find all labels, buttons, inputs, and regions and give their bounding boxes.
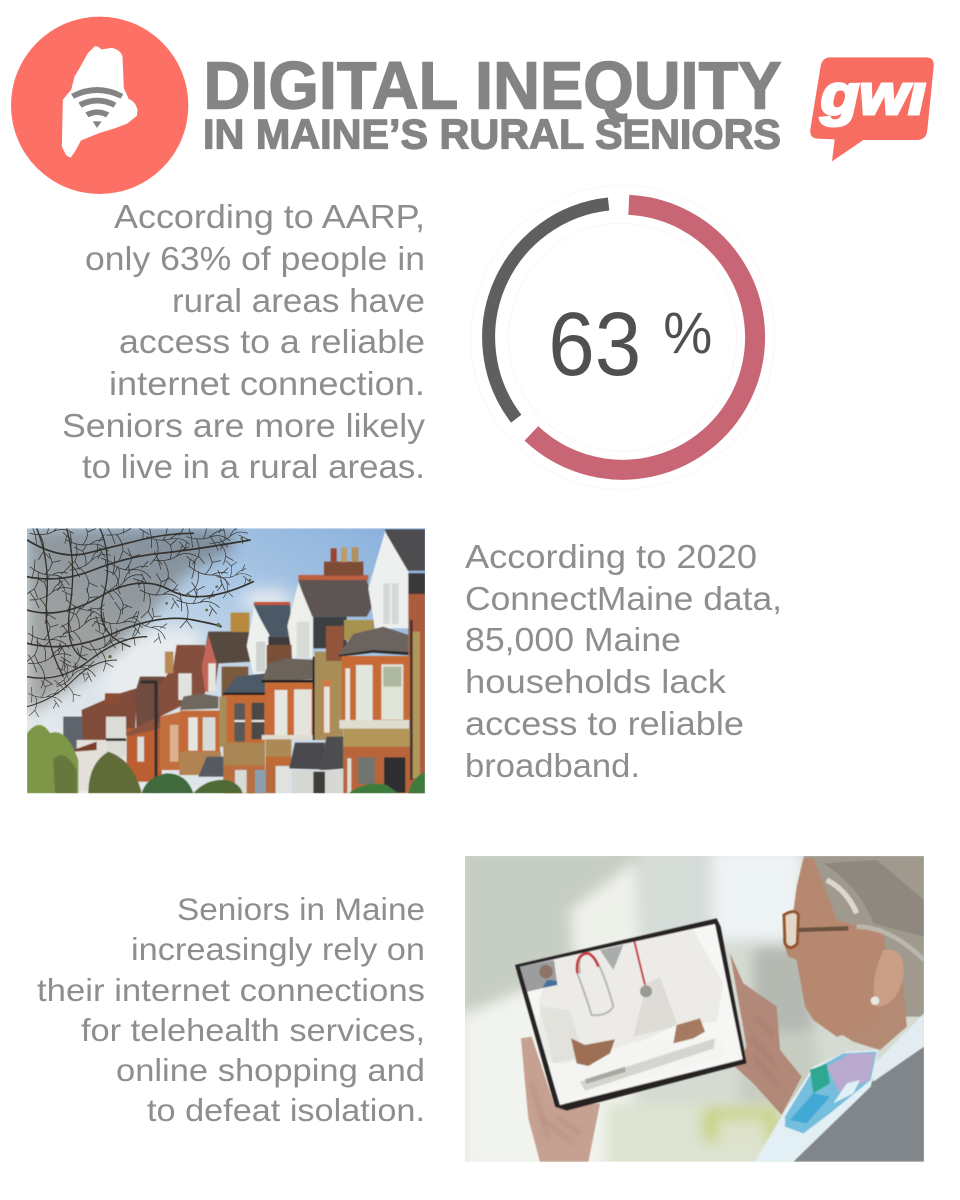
second house [298,580,374,617]
text block: AARP statistic: According to AARP, [114,198,425,235]
value label [548,295,712,395]
text block: ConnectMaine data: 85,000 Maine [465,621,681,658]
text block: telehealth reliance: online shopping and [116,1052,425,1088]
trees and bushes [27,725,78,793]
text block: AARP statistic: Seniors are more likely [62,407,426,444]
lamp post [141,682,156,793]
far hand [730,953,802,1115]
arc: 63 percent segment [531,205,755,470]
title line 2: IN MAINE’S RURAL SENIORS [203,110,781,158]
neck [842,982,908,1050]
photo: row of brick houses [27,528,425,794]
collar [872,1013,924,1082]
text block: ConnectMaine data [465,538,782,784]
right house [385,529,425,571]
tablet screen [520,924,743,1105]
photo: senior on telehealth video call [465,856,924,1162]
text block: telehealth reliance [37,891,425,1128]
value label: 63 [548,295,641,395]
far houses [63,717,83,750]
hair back [803,856,924,1017]
stethoscope [577,953,613,1015]
clouds [100,588,293,707]
face [783,858,890,1037]
doctor hands [571,1038,615,1066]
text block: telehealth reliance: increasingly rely on [131,931,425,967]
text block: AARP statistic [62,198,426,485]
text block: AARP statistic: rural areas have [172,282,425,319]
near hand [521,1037,600,1162]
text block: AARP statistic: to live in a rural areas. [82,448,425,485]
leaves [108,537,251,658]
inset video [520,960,557,992]
porch [289,743,325,769]
sweater [793,1047,924,1162]
doctor coat [538,930,723,1063]
desk [548,1043,635,1106]
icon: Maine state with wifi badge [11,16,188,194]
glasses [784,912,798,948]
hair highlights [823,860,924,937]
text block: ConnectMaine data: ConnectMaine data, [465,580,782,617]
arc: remaining segment [489,204,609,419]
text block: AARP statistic: only 63% of people in [85,240,425,277]
ear [874,950,904,1007]
text block: telehealth reliance: to defeat isolation. [147,1092,425,1128]
scarf [755,1050,878,1162]
icon: GWI logo speech bubble [810,57,934,162]
text block: ConnectMaine data: According to 2020 [465,538,757,575]
tan brick column [315,652,343,740]
text block: telehealth reliance: for telehealth services, [81,1012,425,1048]
text block: telehealth reliance: Seniors in Maine [177,891,425,927]
text block: telehealth reliance: their internet connections [37,972,425,1008]
text block: ConnectMaine data: broadband. [465,747,640,784]
text block: ConnectMaine data: households lack [465,663,727,700]
tree canopy shade [27,528,233,713]
title [203,50,782,158]
icon: GWI logo speech bubble: gwi [820,64,927,127]
title line 1: DIGITAL INEQUITY [204,50,782,124]
text block: AARP statistic: internet connection. [109,365,425,402]
tablet body [515,918,747,1111]
tree branches [27,528,254,718]
text block: ConnectMaine data: access to reliable [465,705,744,742]
text block: AARP statistic: access to a reliable [119,323,425,360]
donut chart: 63 percent [470,185,775,490]
third house [204,630,251,685]
value label: % [663,301,712,366]
